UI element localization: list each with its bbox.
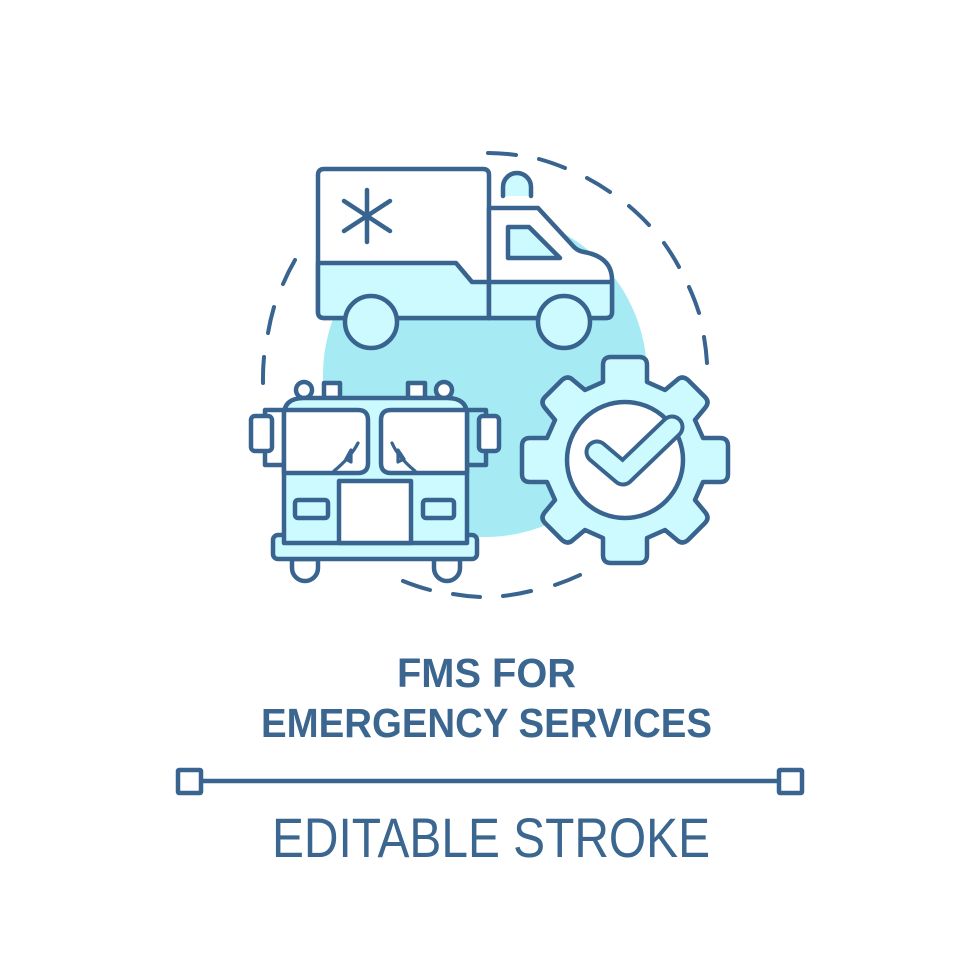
right window [381, 410, 467, 473]
siren [503, 173, 531, 196]
front wheel [538, 296, 590, 348]
rear wheel [345, 296, 397, 348]
background blob [323, 213, 647, 537]
cab [489, 208, 612, 318]
icon: gear with check mark [522, 357, 728, 563]
right wiper [392, 443, 415, 471]
body [284, 398, 467, 543]
stroke slider [178, 770, 802, 793]
icon: fire truck [251, 382, 499, 581]
check mark outline [597, 427, 672, 474]
truck box [318, 169, 489, 318]
cab window [508, 227, 560, 258]
title: EMERGENCY SERVICES [261, 700, 712, 746]
icon: ambulance truck [318, 169, 612, 348]
headlights [295, 500, 328, 518]
cab lower panel [489, 282, 612, 318]
editable stroke label: EDITABLE STROKE [272, 806, 710, 869]
title: FMS FOR [397, 650, 576, 696]
roof lights [296, 382, 312, 398]
gear [522, 357, 728, 563]
bumper [273, 535, 477, 559]
left window [284, 410, 368, 473]
mirror brackets [265, 410, 486, 465]
title [261, 650, 712, 746]
door [339, 481, 411, 543]
wheels [292, 559, 318, 581]
truck box lower panel [318, 263, 489, 318]
left wiper [334, 443, 358, 471]
asterisk [344, 190, 390, 242]
check mark fill [597, 427, 672, 474]
inner circle [567, 402, 683, 518]
dashed circle [263, 153, 707, 597]
mirrors [251, 416, 272, 451]
